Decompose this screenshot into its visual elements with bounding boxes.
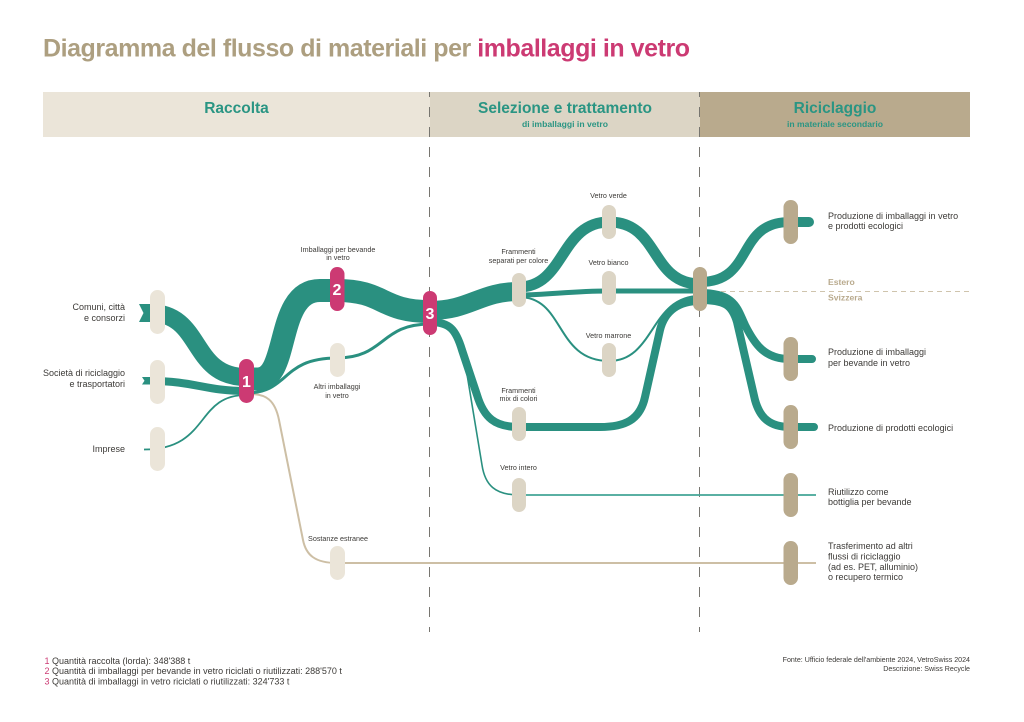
numbered node 3 (423, 291, 437, 335)
flow: 3 to whole glass (463, 350, 519, 495)
flows: foreign substances (250, 394, 816, 563)
destination labels: (ad es. PET, alluminio) (828, 562, 918, 572)
flow: recycling companies to 1 (150, 381, 246, 391)
numbered node 1: 1 (242, 374, 251, 391)
Estero / Svizzera labels (828, 277, 863, 302)
flow: recycling companies tail (142, 377, 152, 384)
flow: beverage packaging to 3 (337, 290, 430, 312)
flow: brown glass (519, 296, 700, 361)
node labels: Vetro verde (590, 191, 627, 200)
source credits: Descrizione: Swiss Recycle (883, 665, 970, 673)
header: Raccolta: Raccolta (204, 100, 269, 117)
numbered node 2 (330, 267, 344, 311)
source labels: e consorzi (84, 313, 125, 323)
pills: collection sources (150, 290, 345, 580)
flow: hub to beverage packaging production (700, 293, 812, 359)
flows: material streams (139, 222, 816, 495)
header: Riciclaggio: Riciclaggio (794, 100, 876, 117)
flow: 3 to sorted cullet (430, 292, 519, 310)
flow: businesses to 1 (144, 395, 246, 450)
node labels: in vetro (325, 391, 349, 400)
source credits: Fonte: Ufficio federale dell'ambiente 2024, VetroSwiss 2024 (783, 656, 970, 664)
node labels: Altri imballaggi (314, 382, 361, 391)
flow: green glass (519, 222, 700, 287)
node labels: Vetro bianco (589, 258, 628, 267)
node labels: mix di colori (500, 394, 538, 403)
numbered node 2: 2 (333, 282, 342, 299)
destination labels: Produzione di imballaggi (828, 347, 926, 357)
destination labels: flussi di riciclaggio (828, 552, 901, 562)
destination labels: Produzione di prodotti ecologici (828, 423, 953, 433)
node labels: Vetro marrone (586, 331, 631, 340)
flow: 3 to mixed cullet and hub (430, 301, 700, 427)
flow: hub to glass packaging and eco products (700, 222, 809, 282)
node labels: Imballaggi per bevande (301, 245, 375, 254)
flow: municipalities tail (139, 304, 152, 322)
flow: white glass (519, 291, 700, 295)
pills: selection nodes (512, 205, 616, 512)
flow: municipalities to 1 (150, 313, 246, 377)
header: Raccolta (43, 92, 430, 137)
node labels: Frammenti (501, 247, 536, 256)
pills: recycling nodes (693, 200, 798, 585)
node labels: Sostanze estranee (308, 534, 368, 543)
footnotes (44, 656, 342, 686)
destination labels: Riutilizzo come (828, 487, 889, 497)
destination labels (828, 211, 958, 582)
header: Selezione e trattamento (430, 92, 700, 137)
footnotes: 3 Quantità di imballaggi in vetro riciclati o riutilizzati: 324'733 t (44, 676, 290, 686)
title: Diagramma del flusso di materiali per imballaggi in vetro (43, 34, 690, 62)
header: Selezione e trattamento: Selezione e trattamento (478, 100, 652, 117)
flow: other packaging (246, 324, 430, 393)
source labels: Imprese (92, 444, 125, 454)
destination labels: per bevande in vetro (828, 358, 910, 368)
node labels: Frammenti (501, 386, 536, 395)
footnotes: 1 Quantità raccolta (lorda): 348'388 t (44, 656, 191, 666)
node labels: separati per colore (489, 256, 548, 265)
destination labels: e prodotti ecologici (828, 221, 903, 231)
source labels: e trasportatori (69, 379, 125, 389)
source labels (43, 302, 125, 454)
node labels: Vetro intero (500, 463, 537, 472)
header: Selezione e trattamento: di imballaggi in vetro (522, 119, 608, 129)
flow: 1 to beverage packaging (246, 290, 337, 379)
Estero / Svizzera labels: Svizzera (828, 292, 863, 302)
destination labels: Trasferimento ad altri (828, 541, 913, 551)
flow: hub to eco products (700, 300, 814, 427)
destination labels: o recupero termico (828, 572, 903, 582)
footnotes: 2 Quantità di imballaggi per bevande in vetro riciclati o riutilizzati: 288'570 t (44, 666, 342, 676)
source labels: Comuni, città (72, 302, 125, 312)
Estero / Svizzera labels: Estero (828, 277, 855, 287)
destination labels: bottiglia per bevande (828, 497, 912, 507)
source credits (783, 656, 970, 673)
header: Riciclaggio (700, 92, 970, 137)
node labels: in vetro (326, 253, 350, 262)
source labels: Società di riciclaggio (43, 368, 125, 378)
destination labels: Produzione di imballaggi in vetro (828, 211, 958, 221)
numbered node 3: 3 (426, 306, 435, 323)
numbered node 1 (239, 359, 254, 403)
node labels (301, 191, 631, 543)
header: Riciclaggio: in materiale secondario (787, 119, 883, 129)
